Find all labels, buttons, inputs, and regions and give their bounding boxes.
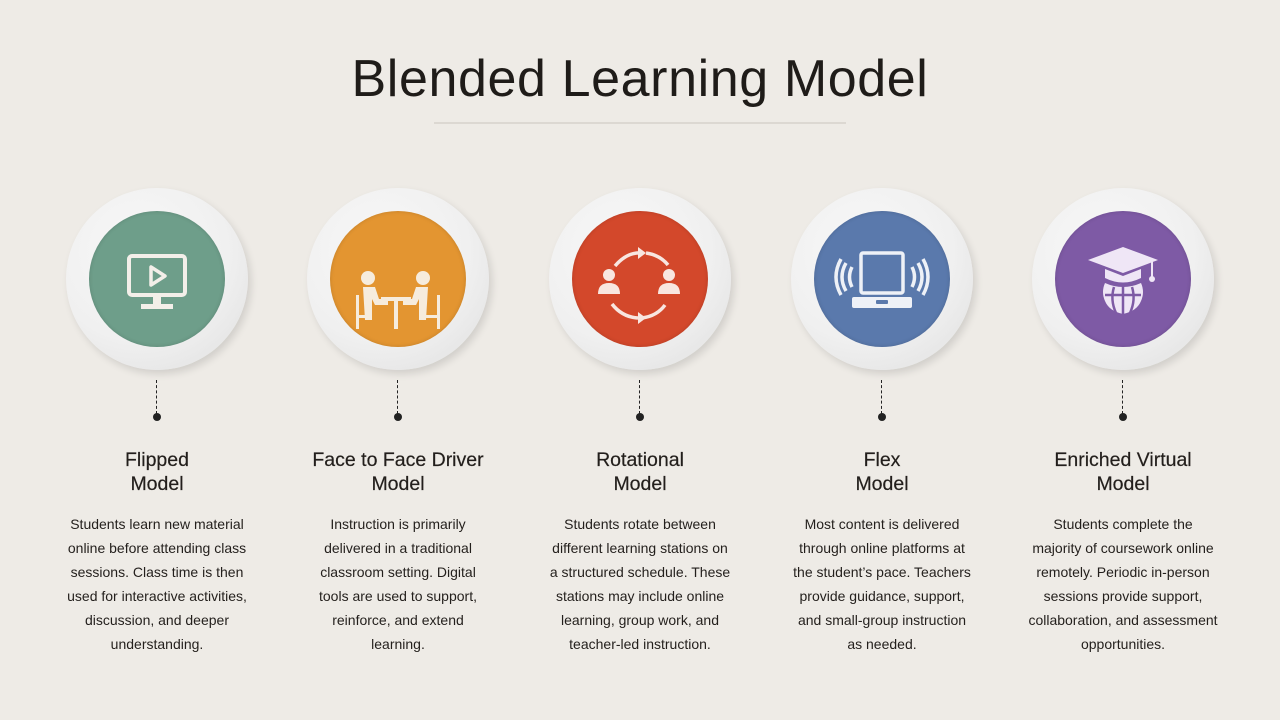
text: sessions. Class time is then [71,564,243,580]
text: reinforce, and extend [332,612,464,628]
text: delivered in a traditional [324,540,472,556]
text: collaboration, and assessment [1028,612,1218,628]
text: Instruction is primarily [330,516,466,532]
text: online before attending class [68,540,246,556]
column: flipped model [66,188,253,652]
text: learning. [371,636,425,652]
column: enriched virtual [1028,188,1219,652]
heading: Model [1096,473,1150,495]
text: Students complete the [1053,516,1193,532]
text [550,516,730,652]
text: different learning stations on [552,540,728,556]
text: sessions provide support, [1044,588,1202,604]
icon: laptop with signal [791,188,973,370]
heading: Rotational [596,449,684,471]
heading [312,449,484,495]
text [1028,516,1218,652]
title: Blended Learning Model [352,50,928,108]
text: through online platforms at [799,540,965,556]
heading: Flipped [125,449,189,471]
column: flex [791,188,978,652]
text: understanding. [111,636,203,652]
heading [125,449,189,495]
text: used for interactive activities, [67,588,247,604]
heading: Face to Face Driver [312,449,484,471]
heading [1054,449,1192,495]
heading: Model [613,473,667,495]
heading [596,449,684,495]
icon: grad cap globe [1032,188,1214,370]
text: learning, group work, and [561,612,719,628]
heading: Model [855,473,909,495]
text: classroom setting. Digital [320,564,476,580]
icon: monitor with play [66,188,248,370]
text: Most content is delivered [805,516,959,532]
text: a structured schedule. These [550,564,730,580]
text: opportunities. [1081,636,1165,652]
text [319,516,477,652]
text: and small-group instruction [798,612,966,628]
text: as needed. [847,636,917,652]
column: face to face [307,188,494,652]
text: tools are used to support, [319,588,477,604]
heading: Model [130,473,184,495]
text: stations may include online [556,588,724,604]
icon: rotating people [549,188,731,370]
text: the student’s pace. Teachers [793,564,971,580]
column: rotational [549,188,736,652]
heading: Model [371,473,425,495]
text: discussion, and deeper [85,612,229,628]
text: teacher-led instruction. [569,636,711,652]
text: majority of coursework online [1032,540,1214,556]
heading [855,449,909,495]
text [793,516,971,652]
text: remotely. Periodic in-person [1036,564,1210,580]
text: Students rotate between [564,516,716,532]
text [67,516,247,652]
heading: Flex [864,449,900,471]
text: Students learn new material [70,516,244,532]
icon: people at table [307,188,489,370]
text: provide guidance, support, [800,588,964,604]
heading: Enriched Virtual [1054,449,1192,471]
